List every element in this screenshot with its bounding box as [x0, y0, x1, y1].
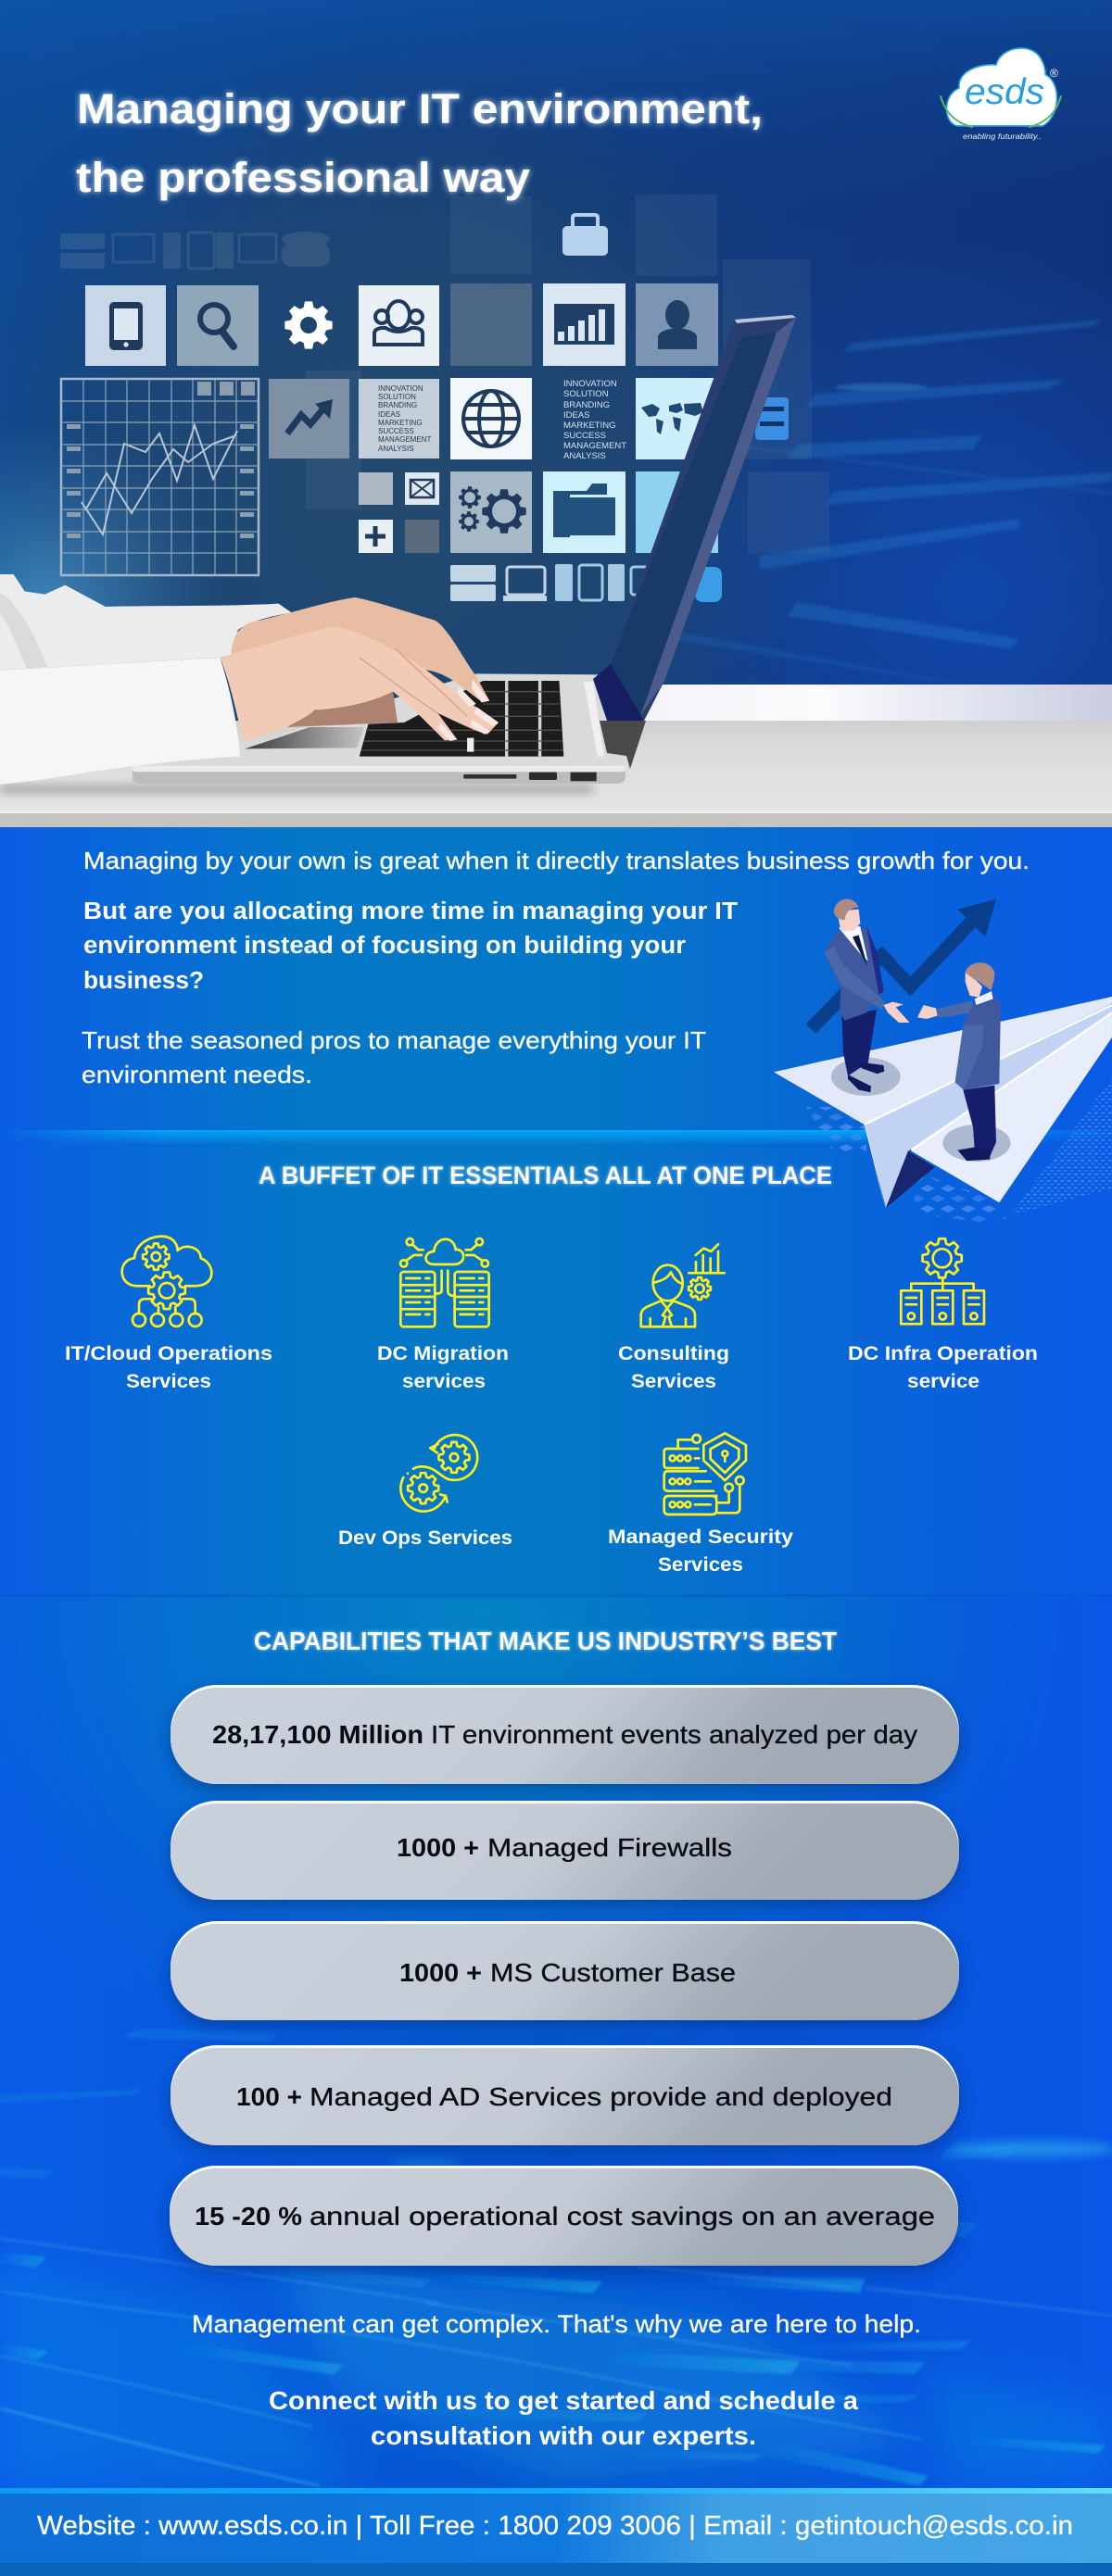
title: the professional way — [76, 154, 530, 201]
palm shadow — [287, 692, 398, 727]
tile: word list: MANAGEMENT — [378, 435, 431, 444]
arms and hands — [0, 574, 499, 785]
icon: cloud with gears — [122, 1237, 211, 1326]
keyboard — [360, 681, 563, 757]
closing line: Management can get complex. That's why we are here to help. — [192, 2310, 921, 2338]
tile: word list: INNOVATION — [378, 384, 423, 393]
word list on dark: MARKETING — [563, 421, 615, 431]
tile: people — [359, 285, 439, 366]
word list on dark: MANAGEMENT — [563, 441, 626, 451]
word list on dark: IDEAS — [563, 410, 590, 421]
tile: globe — [450, 378, 532, 459]
service: DC Infra Operation: service — [907, 1371, 979, 1392]
tile: phone — [85, 285, 166, 366]
icon: consultant with chart — [641, 1244, 725, 1326]
call to action: consultation with our experts. — [371, 2421, 756, 2450]
logo: esds: ® — [1050, 67, 1058, 80]
tile: partially hidden cyan — [636, 471, 718, 553]
capability pill 3: 1000 + — [399, 1958, 482, 1987]
word list on dark: SOLUTION — [563, 389, 609, 399]
capability pill 3 — [171, 1921, 959, 2020]
question paragraph: But are you allocating more time in managing your IT — [83, 898, 738, 924]
word list on dark: BRANDING — [563, 400, 610, 410]
service: Dev Ops — [338, 1435, 512, 1549]
service: Managed Security — [608, 1433, 793, 1576]
tile: word list: SUCCESS — [378, 427, 414, 435]
light streaks — [0, 2214, 1112, 2485]
call to action — [269, 2386, 858, 2450]
word list on dark: INNOVATION — [563, 379, 617, 389]
icon: settings gear — [284, 301, 333, 349]
service: DC Migration: services — [402, 1371, 486, 1392]
logo: esds — [941, 48, 1061, 141]
capability pill 5 — [170, 2166, 958, 2266]
front hand — [221, 627, 499, 741]
service: Managed Security: Managed Security — [608, 1527, 793, 1548]
back hand — [232, 597, 489, 701]
capability pill 2: 1000 + — [397, 1833, 479, 1862]
service: Managed Security: Services — [658, 1554, 743, 1576]
illustration: paper plane and businessmen — [774, 899, 1112, 1208]
desk — [0, 685, 1112, 827]
icon: gear over three servers — [901, 1238, 984, 1324]
businessman left — [824, 899, 910, 1096]
tile: word list: IDEAS — [378, 410, 400, 419]
finger lines — [360, 648, 467, 716]
tile: word list: SOLUTION — [378, 393, 416, 401]
capability pill 1 — [171, 1685, 959, 1784]
question paragraph: environment instead of focusing on building your — [83, 933, 686, 959]
capability pill 2 — [171, 1801, 959, 1900]
tile: gears — [450, 471, 532, 553]
growth arrow — [811, 899, 996, 1029]
call to action: Connect with us to get started and schedule a — [269, 2386, 858, 2415]
faint background tiles — [306, 195, 829, 553]
line chart grid — [61, 379, 259, 575]
word list on dark: ANALYSIS — [563, 451, 606, 461]
paper plane — [774, 997, 1112, 1208]
service: IT/Cloud Operations: IT/Cloud Operations — [65, 1343, 272, 1364]
icon: briefcase — [562, 215, 608, 256]
lower sleeve — [0, 658, 240, 785]
capability pill 2: Managed Firewalls — [487, 1833, 732, 1862]
icon: servers with cloud — [400, 1238, 489, 1326]
tile: word list: ANALYSIS — [378, 445, 414, 453]
broad glow bands — [0, 2260, 1112, 2482]
logo: esds: esds — [965, 72, 1044, 112]
device icons row — [450, 564, 722, 602]
capability pill 1: 28,17,100 Million — [212, 1720, 423, 1749]
capability pill 5: 15 -20 % — [195, 2202, 302, 2230]
footer bar: Website : www.esds.co.in | Toll Free : 1800 209 3006 | Email : getintouch@esds.co.in — [37, 2511, 1073, 2541]
lower body background — [0, 827, 1112, 2488]
service: IT/Cloud Operations: Services — [126, 1371, 211, 1392]
heading: capabilities: CAPABILITIES THAT MAKE US INDUSTRY’S BEST — [254, 1627, 837, 1655]
icon: server stack with shield — [664, 1433, 746, 1514]
intro line: Managing by your own is great when it directly translates business growth for you. — [83, 847, 1030, 874]
capability pill 1: IT environment events analyzed per day — [431, 1720, 917, 1749]
footer bar — [0, 2488, 1112, 2576]
fingernails — [438, 679, 499, 741]
heading: buffet: A BUFFET OF IT ESSENTIALS ALL AT ONE PLACE — [259, 1162, 832, 1189]
service: Consulting: Services — [631, 1371, 716, 1392]
question paragraph: business? — [83, 968, 204, 994]
laptop base — [133, 673, 626, 784]
trust paragraph: environment needs. — [82, 1061, 312, 1088]
dot pattern behind plane — [806, 1077, 1112, 1223]
tile: user — [636, 283, 718, 366]
tile: world map — [636, 378, 717, 459]
tile: bar chart — [543, 283, 626, 366]
tile: word list: MARKETING — [378, 419, 423, 427]
tile: trend arrow — [269, 379, 349, 459]
faint server icons row — [60, 232, 330, 269]
service: Dev Ops: Dev Ops Services — [338, 1527, 512, 1549]
service: DC Migration — [377, 1238, 509, 1392]
service: DC Infra Operation — [848, 1238, 1038, 1392]
title: Managing your IT environment, — [77, 85, 763, 132]
service: Consulting — [618, 1244, 729, 1392]
capability pill 4 — [171, 2045, 959, 2145]
question paragraph — [83, 898, 738, 994]
laptop lid — [593, 315, 796, 769]
title — [76, 85, 763, 201]
tile: blank slate — [450, 283, 532, 366]
service: Consulting: Consulting — [618, 1343, 729, 1364]
service: DC Infra Operation: DC Infra Operation — [848, 1343, 1038, 1364]
capability pill 3: MS Customer Base — [490, 1958, 736, 1987]
tile: search — [177, 285, 259, 366]
capability pill 4: Managed AD Services provide and deployed — [310, 2082, 892, 2111]
word list on dark — [563, 379, 626, 461]
background light streaks — [667, 320, 1112, 685]
trust paragraph — [82, 1026, 706, 1088]
tile: folder — [543, 471, 626, 553]
tile: right list icon — [755, 397, 789, 440]
trust paragraph: Trust the seasoned pros to manage everything your IT — [82, 1026, 706, 1054]
word list on dark: SUCCESS — [563, 431, 606, 441]
capability pill 4: 100 + — [236, 2082, 302, 2111]
laptop — [133, 315, 796, 784]
capability pill 5: annual operational cost savings on an average — [310, 2202, 935, 2230]
businessman right — [917, 962, 1011, 1162]
section divider band — [19, 1130, 1106, 1143]
logo: esds: enabling futurability.. — [963, 132, 1042, 141]
tile: word list: BRANDING — [378, 401, 417, 409]
service: IT/Cloud Operations — [65, 1237, 272, 1392]
upper sleeve — [0, 574, 292, 670]
service: DC Migration: DC Migration — [377, 1343, 509, 1364]
icon: cycling gears — [400, 1435, 477, 1512]
tile: word list — [359, 379, 439, 459]
small tiles cluster — [359, 472, 439, 553]
